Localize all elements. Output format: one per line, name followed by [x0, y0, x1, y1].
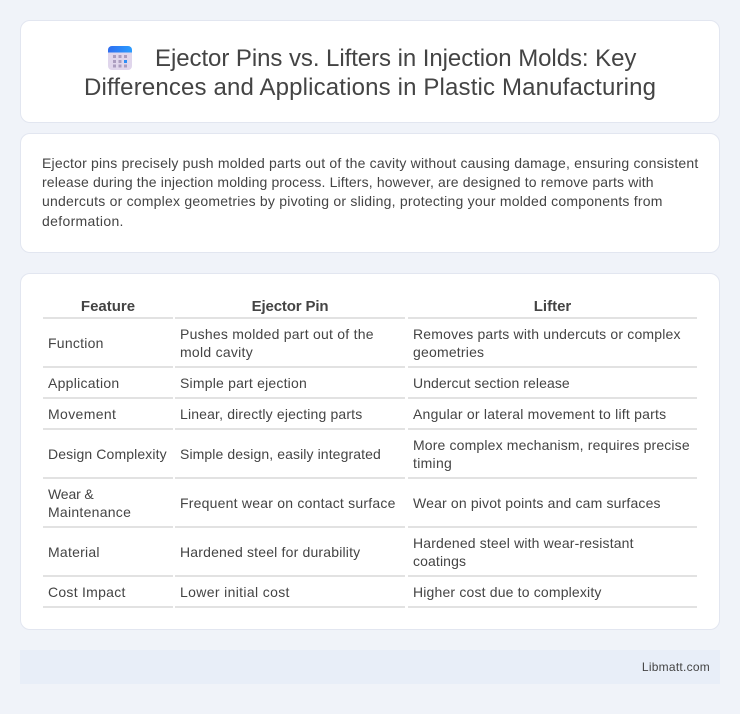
comparison table: Simple design, easily integrated — [180, 446, 381, 462]
row: function — [48, 326, 681, 360]
comparison table: Wear on pivot points and cam surfaces — [413, 495, 661, 511]
comparison table: Material — [48, 544, 100, 560]
comparison table: Cost Impact — [48, 584, 126, 600]
row: material — [48, 535, 634, 569]
comparison table: Wear & — [48, 486, 94, 502]
panel: comparison table card — [20, 273, 720, 630]
title — [84, 45, 656, 101]
comparison table: Simple part ejection — [180, 375, 307, 391]
row: design complexity — [48, 437, 690, 471]
row: application — [48, 375, 570, 391]
text block: intro — [42, 155, 698, 229]
comparison table: Hardened steel with wear-resistant — [413, 535, 634, 551]
comparison table: Maintenance — [48, 504, 131, 520]
title: Differences and Applications in Plastic Manufacturing — [84, 74, 656, 101]
panel: intro paragraph — [20, 133, 720, 253]
text block: intro: deformation. — [42, 213, 124, 229]
comparison table: Ejector Pin — [252, 298, 328, 315]
footer credit: Libmatt.com — [642, 660, 710, 674]
comparison table: geometries — [413, 344, 484, 360]
comparison table: Lifter — [534, 298, 571, 315]
comparison table: Hardened steel for durability — [180, 544, 360, 560]
comparison table: Removes parts with undercuts or complex — [413, 326, 681, 342]
comparison table: Feature — [81, 298, 135, 315]
comparison table: More complex mechanism, requires precise — [413, 437, 690, 453]
row: movement — [48, 406, 666, 422]
comparison table: Design Complexity — [48, 446, 167, 462]
comparison table: Movement — [48, 406, 116, 422]
text block: intro: undercuts or complex geometries by pivoting or sliding, protecting your molded components from — [42, 193, 663, 209]
footer bar — [20, 650, 720, 684]
table header — [81, 298, 571, 315]
comparison table: Undercut section release — [413, 375, 570, 391]
title: Ejector Pins vs. Lifters in Injection Molds: Key — [155, 45, 636, 72]
row: wear and maintenance — [48, 486, 661, 520]
comparison table: mold cavity — [180, 344, 253, 360]
comparison table: Pushes molded part out of the — [180, 326, 374, 342]
comparison table: coatings — [413, 553, 466, 569]
text block: intro: release during the injection molding process. Lifters, however, are designed to remove parts with — [42, 174, 654, 190]
comparison table: Function — [48, 335, 104, 351]
comparison table: Frequent wear on contact surface — [180, 495, 396, 511]
comparison table: Application — [48, 375, 119, 391]
icon: calendar — [108, 46, 132, 70]
row: cost impact — [48, 584, 602, 600]
comparison table — [43, 298, 697, 608]
comparison table: Linear, directly ejecting parts — [180, 406, 362, 422]
comparison table: timing — [413, 455, 452, 471]
comparison table: Lower initial cost — [180, 584, 290, 600]
text block: intro: Ejector pins precisely push molded parts out of the cavity without causing damage, ensuring consistent — [42, 155, 698, 171]
comparison table: Angular or lateral movement to lift parts — [413, 406, 666, 422]
panel: title header — [20, 20, 720, 123]
comparison table: Higher cost due to complexity — [413, 584, 602, 600]
